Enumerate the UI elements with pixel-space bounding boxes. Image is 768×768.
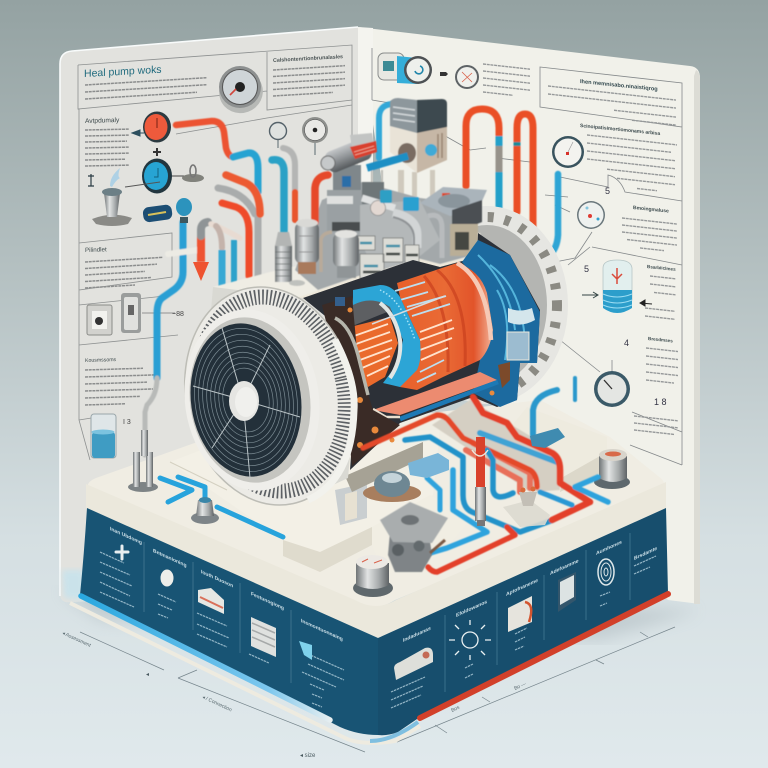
red mark [442,193,450,198]
ring vents [417,217,557,393]
box outlines [372,48,682,465]
blue chip [335,297,345,306]
side vents [438,133,442,158]
right labels: Adefoamme [550,558,579,577]
divider lines [144,533,630,692]
bracket slot [345,491,357,521]
tall blue pipe [272,160,284,233]
section heading: Bresdmses [648,336,673,344]
blue interior region [462,240,540,407]
icon: wall switches: −88 [172,311,184,318]
blue short right [540,492,572,505]
ribbed cylinder [275,232,292,282]
right labels: Brsdamte [634,546,657,562]
light blue vertical 2 [231,240,237,284]
icon: thermostat [378,53,432,84]
left board surface [60,27,360,602]
clear manifold [503,486,550,527]
blue front left [80,508,378,735]
left labels [110,526,343,643]
ring inner [427,225,547,385]
floor annotations: ◂ size [300,753,316,759]
icon: small dish [182,165,204,182]
icon: fan cross [116,546,128,559]
right labels [403,540,657,644]
lip shade [179,309,321,491]
connector [321,156,335,170]
top text box outlines [78,45,352,460]
subheading: Calshontenrtionbrunalasles [273,54,343,64]
red pipe top left [176,121,233,157]
front gauge cylinder [353,555,393,597]
board bottom blue glow [62,570,84,600]
mid machine white [327,196,353,204]
streaks right blue [395,282,450,382]
icon: white disc [160,570,174,586]
ring body [406,206,568,404]
pale box [507,332,529,360]
icon: water stack [582,260,652,313]
icon: water glass [91,414,131,458]
blue pipe by hvac [379,104,392,158]
orange detail [498,362,510,388]
jar 1 [295,219,319,274]
thin base pipes [160,477,283,537]
pink lanes [466,443,530,492]
right labels: Indaduanas [403,626,431,644]
bolt on shelf [289,280,305,286]
body text lines [483,64,678,435]
icon: red dial [143,112,171,142]
icon: water glass: I 3 [123,419,131,426]
plate outline [170,462,227,490]
machinery on top [213,98,487,315]
printer stripe [200,597,223,608]
shelf [213,235,480,310]
right rim [308,340,354,500]
duct background [432,400,560,492]
cream foot strip [70,603,420,743]
grey bracket [335,483,367,525]
left labels: Festunogiong [251,591,284,612]
red u [428,527,515,572]
left board outline glow [60,27,358,596]
section label: Pilindlet [85,246,107,254]
band light edge [380,303,400,378]
pink cap [370,200,386,216]
floor annotations: ◂ [146,672,149,678]
icon: blue label [142,204,173,223]
panel: left board [60,27,360,602]
blue pipe top left [233,153,258,192]
pale pipe [211,224,240,238]
grey pipe [218,188,258,278]
top right face [417,99,447,133]
streaks right orange [420,320,454,360]
compressor [380,502,448,572]
card accent [525,602,531,622]
hvac unit [372,98,447,204]
right block top [420,187,487,216]
icon: concentric circles [598,559,614,585]
right block tray [438,194,470,208]
blue under dome [427,478,440,510]
dark marks [363,254,418,272]
ring back shell [200,287,355,505]
opening [398,143,416,163]
icon: large gauge [213,65,269,119]
coil rim [457,263,491,340]
icon: burner stand [88,168,160,226]
icon: sun [449,620,491,660]
panel text lines [100,552,656,708]
body front [390,126,417,173]
mid cluster background [360,200,440,272]
floor annotations [61,627,675,759]
blue lane light [480,433,557,462]
white cross pipe [168,250,198,254]
blue long [405,437,553,532]
icon: blue knob [176,198,192,223]
red loop two [517,114,533,256]
grille spokes [193,328,300,478]
valve cap [350,133,374,147]
arrow: red down [193,262,209,281]
section heading: Bmoingmaluse [633,205,669,215]
left long blue pipe [157,222,183,378]
teal ring [514,142,520,146]
mid machine [327,190,365,232]
red box slats [354,146,375,155]
base platform step [160,407,607,575]
lower support [345,442,423,492]
battery ribs [252,623,275,647]
vent band [181,283,363,505]
section heading: Bsarbiiclmes [647,264,676,272]
right labels: Aumhones [596,540,622,557]
top left face [390,98,417,133]
icon: card [508,596,532,632]
grille [181,316,311,484]
right board edge [694,70,700,604]
pale blue corner strip [370,722,418,741]
dark ring upper inner [350,288,392,327]
blue compressor [430,470,487,553]
louvers [393,107,415,122]
base top face [88,400,664,607]
silver rod [372,296,445,324]
icon: battery [251,617,276,657]
teal cube 2 [403,197,419,211]
chrome big pipe shade [393,217,414,248]
blue band [353,285,421,387]
floor blue edge [400,382,498,419]
icon: phone [558,572,576,612]
floor annotations: Bo — [513,681,527,692]
right dark side [452,200,482,230]
left labels: Insmontuonnaing [301,618,343,643]
icon: cross dial [455,65,479,89]
ring outer [165,271,375,521]
left lower grey pipe [145,378,157,455]
body text lines [85,66,345,405]
icon: bottom dial [594,371,630,407]
front ring [165,271,375,521]
valve: right cylinder [594,449,630,489]
pipes on back panels [145,104,558,455]
valve: left [128,430,158,492]
red pipe orange [226,175,260,214]
red pipe near machine [315,175,328,222]
section heading: Ihen memnisabo.ninaistiqrog [580,79,658,93]
body and cutaway [165,233,540,521]
blue bottom strip [81,596,330,720]
lower right box [450,224,478,256]
right labels: Aptofnaneme [506,578,538,598]
red arrow stem [197,235,205,262]
stand columns [372,170,382,200]
connector [153,148,161,156]
base [70,400,668,743]
mid machine 2 [362,182,384,204]
red long [363,415,537,487]
blue front right [378,508,668,735]
blue pipe to hvac [367,156,408,168]
numbers: 4 [624,338,629,348]
box colour marks [360,243,400,266]
arrow [132,130,144,136]
grey conduit [335,318,368,395]
left labels: Bntmanioning [153,548,187,569]
right platform front [560,452,607,492]
blue riser 2 [573,378,577,400]
coil left [350,317,398,387]
icon: blue flag [299,641,312,660]
blue bracket right [575,477,608,502]
right blue pipe [548,174,558,256]
cut interior dark [303,233,540,470]
coil ring shade [424,270,465,372]
red second [473,397,590,520]
left labels: Iouth Duoson [201,569,233,589]
step corner notch [372,495,470,575]
icon: dial right [552,136,584,168]
lower dark box [455,232,469,250]
valve: centre [191,497,219,524]
section label: Avtpdumaly [85,117,120,125]
arrow [440,72,448,76]
chrome big pipe [393,213,417,248]
left labels: Inan Ubdomg [110,526,142,546]
machine backing [295,182,478,290]
red loop one [466,109,499,186]
right raised platform [500,407,607,477]
panel: right board [358,27,700,604]
icon: droplet gauge [577,201,605,229]
blue small block [342,176,351,187]
blue short [487,450,513,497]
inner lip [173,301,331,499]
red pill knob [422,652,430,658]
body side [417,127,447,173]
blue right riser [533,390,557,437]
grey loop segment [496,146,502,172]
mid machine label [332,222,360,231]
band sparkle [380,290,415,340]
small gauges [270,117,328,155]
pale vertical [216,226,222,248]
jar 2 [333,230,359,278]
salmon floor [373,372,497,415]
stand [398,170,435,204]
lower components [353,428,565,597]
far ring [406,206,568,404]
step block front [283,527,372,572]
phone screen [560,575,574,605]
section label: Kousmssoms [85,357,117,364]
grey tube red segment [292,192,298,220]
panel icons [116,546,614,680]
light blue vertical [218,250,226,288]
valve body [323,137,374,174]
floor annotations: Bos [450,705,461,714]
floor lip [373,409,400,417]
teal cube 1 [380,190,392,203]
blue dial [425,144,437,156]
icon: printer [198,588,224,614]
icon: white pill [394,648,433,680]
hub shade [235,387,257,417]
numbers [584,186,667,407]
icon: wall switches [87,293,184,335]
lower pipework [363,378,608,572]
hub [229,381,259,421]
raised plate under fan [170,430,440,552]
floor annotations: ◂ / Connection [201,694,233,713]
red bottom strip [420,594,668,718]
floor annotations: ◂ Assessment [61,630,92,649]
orange electronics dots [338,308,494,448]
coil right [397,263,493,390]
chrome arch [428,215,442,258]
dome [363,471,421,502]
red pipe elbow [222,203,249,276]
white pipes cluster [508,308,535,325]
base lip [86,482,666,638]
pale pipe horizontal [362,198,395,208]
blue detail swirls [478,255,525,360]
heating streaks left [354,324,392,376]
shelf rim [250,233,478,315]
blue box [408,453,449,478]
icon: blue dial [142,158,192,194]
numbers: 5 [584,264,589,274]
right board fold [358,27,373,270]
chrome arc left of jar [321,232,332,272]
panel: back board shadow [60,590,700,640]
numbers: 1 8 [654,397,667,407]
right board surface [358,27,700,604]
numbers: 5 [605,186,610,196]
blue tail loop one [496,136,502,212]
red box [350,141,377,159]
valve stem block [333,165,361,195]
right labels: Efoldowanos [456,599,487,619]
electronics strip [322,296,400,466]
grey tube behind blue [283,148,295,220]
grey elbow [201,222,208,236]
heading: Heal pump woks [84,64,162,80]
small boxes [357,236,419,278]
ring outer edge [165,271,375,521]
red valve [472,437,488,526]
right blue box [530,428,565,448]
section heading: Scinoipatisimortiomonams arbisa [580,123,660,137]
grille rings [185,322,307,478]
